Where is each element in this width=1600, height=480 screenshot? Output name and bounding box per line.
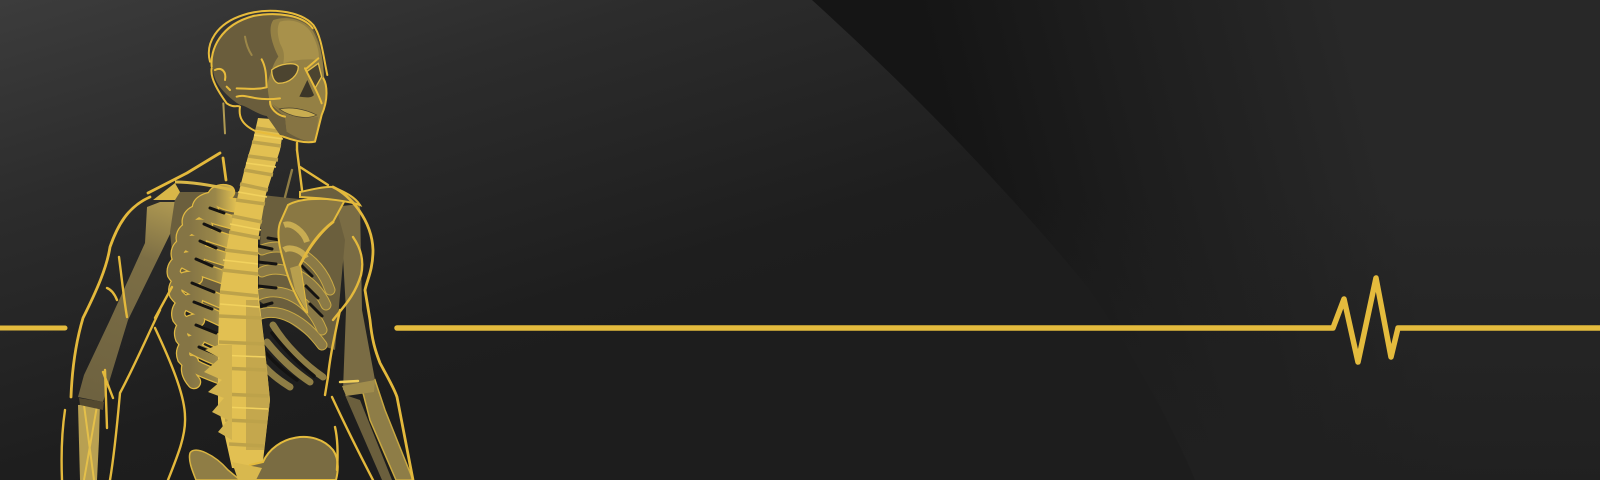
skull [209,11,327,142]
rib cage backing left [170,192,240,320]
left ribs [174,191,240,382]
cranium [212,13,326,142]
jaw shadow [272,103,318,142]
right scapula [278,199,345,312]
far eye socket [307,63,322,88]
heartbeat line: left segment [0,326,65,330]
spine [204,118,285,470]
right clavicle [300,187,360,205]
right humerus [333,204,375,394]
right forearm bones [342,380,413,480]
vertebra processes [204,345,232,440]
heartbeat line: right segment with pulse [397,278,1600,362]
left forearm bones [78,398,104,480]
skeleton figure [62,11,413,480]
left shoulder joint and clavicle [153,182,232,200]
body contour lines [62,143,413,480]
forehead highlight [278,20,319,63]
skull outlines [209,11,327,142]
rib cage backing right [258,195,345,350]
pelvis [189,437,338,480]
eye socket [272,64,298,83]
right ribs [258,238,330,387]
spine shaded side [246,300,270,450]
left humerus [78,202,183,402]
lit face [268,18,326,142]
teeth [279,108,317,117]
nose [299,80,314,97]
